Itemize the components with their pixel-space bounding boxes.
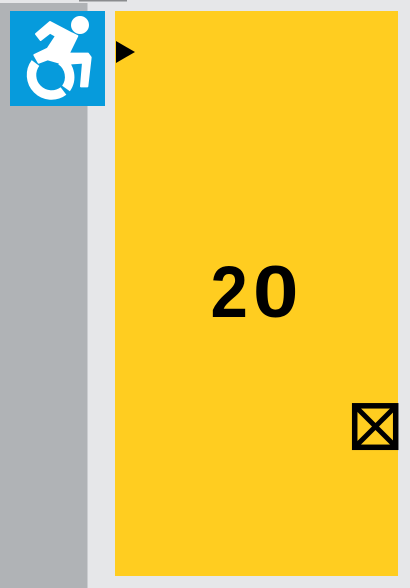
big number: 0 [253, 252, 298, 333]
icon: crossed box [355, 406, 396, 447]
left grey panel [0, 3, 88, 588]
top edge bar [79, 0, 127, 2]
arrow marker [116, 41, 135, 63]
big number: 2 [210, 251, 248, 333]
yellow panel [115, 11, 398, 576]
big number [210, 251, 298, 333]
icon: accessibility wheelchair [10, 11, 105, 106]
